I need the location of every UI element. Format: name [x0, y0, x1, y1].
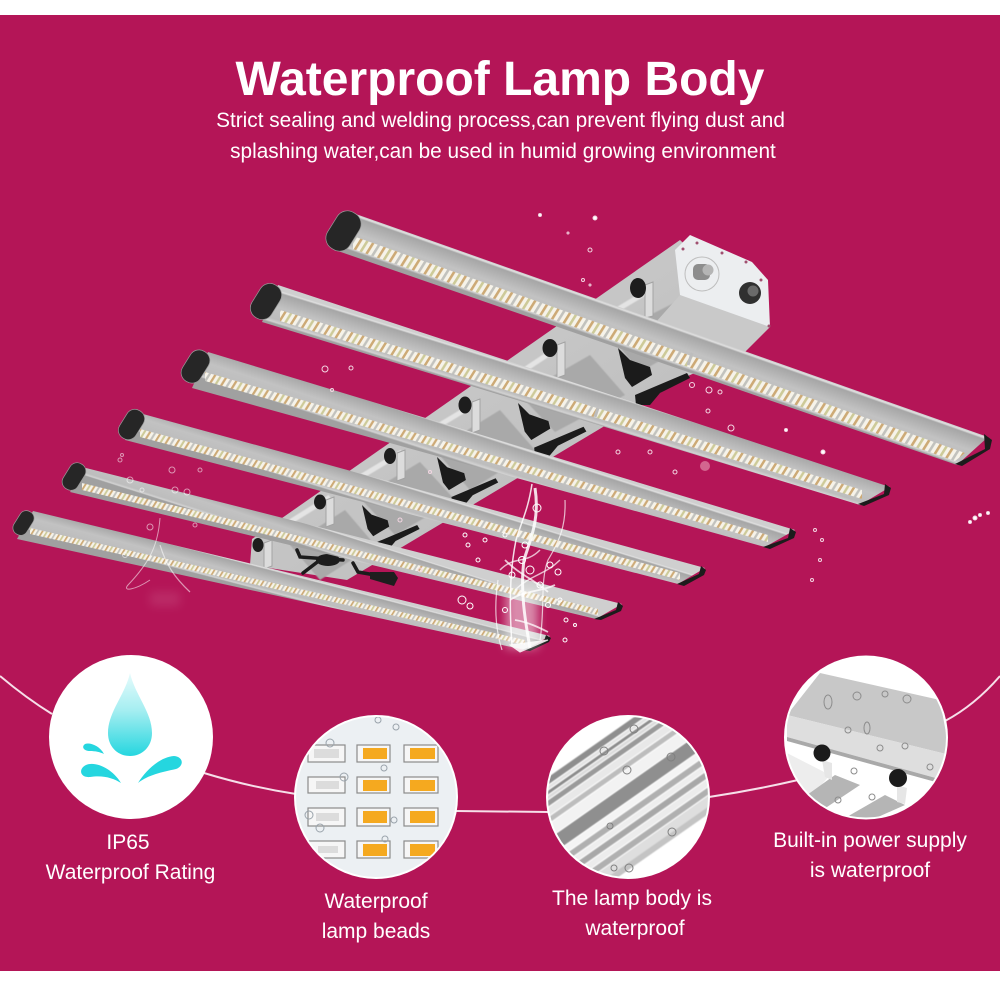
circle: lamp beads — [294, 715, 458, 879]
black clamps — [362, 348, 690, 551]
power box side — [640, 295, 770, 375]
lamp bar 2 — [246, 279, 891, 506]
box screws — [682, 242, 770, 328]
icon: splashes — [81, 743, 182, 783]
central rail — [250, 240, 770, 580]
label: lamp beads — [322, 890, 430, 943]
rail highlight strips — [285, 290, 650, 525]
rail channel details — [290, 300, 705, 580]
lamp bar 6 — [10, 508, 551, 651]
knobs and brackets — [252, 278, 653, 569]
subtitle: Strict sealing and welding process,can prevent flying dust and — [216, 109, 785, 132]
label: IP65: IP65 — [106, 831, 150, 854]
label: lamp body: waterproof — [584, 917, 685, 940]
lamp bar 1 — [321, 206, 992, 466]
label: power supply: Built-in power supply — [773, 829, 967, 852]
subtitle — [216, 109, 785, 163]
label: IP65: Waterproof Rating — [46, 861, 215, 884]
circle: power supply — [775, 656, 950, 825]
clamp and cable near rail end — [297, 550, 375, 575]
circle: IP65 icon — [49, 655, 213, 819]
label: lamp beads: Waterproof — [324, 890, 428, 913]
label: lamp body: The lamp body is — [552, 887, 712, 910]
scattered water droplets — [322, 214, 990, 582]
icon: water drop — [108, 673, 152, 756]
water splash: centre column — [458, 484, 576, 652]
water splash: left — [118, 454, 202, 606]
cable connector — [370, 572, 398, 586]
power box face — [675, 235, 770, 327]
lamp bar 5 — [59, 460, 623, 620]
label: power supply — [773, 829, 967, 882]
label: power supply: is waterproof — [810, 859, 930, 882]
box gland — [685, 257, 719, 291]
connecting curve — [0, 676, 1000, 812]
lamp bar 3 — [177, 346, 796, 549]
subtitle: splashing water,can be used in humid growing environment — [230, 140, 776, 163]
lamp bar 4 — [115, 406, 706, 586]
title: Waterproof Lamp Body — [236, 53, 765, 106]
label: IP65 — [46, 831, 215, 884]
LED grid — [308, 745, 438, 858]
box connector — [739, 282, 761, 304]
product: LED grow light fixture — [10, 206, 992, 651]
circle: lamp body — [546, 715, 710, 879]
label: lamp beads: lamp beads — [322, 920, 430, 943]
label: lamp body — [552, 887, 712, 940]
